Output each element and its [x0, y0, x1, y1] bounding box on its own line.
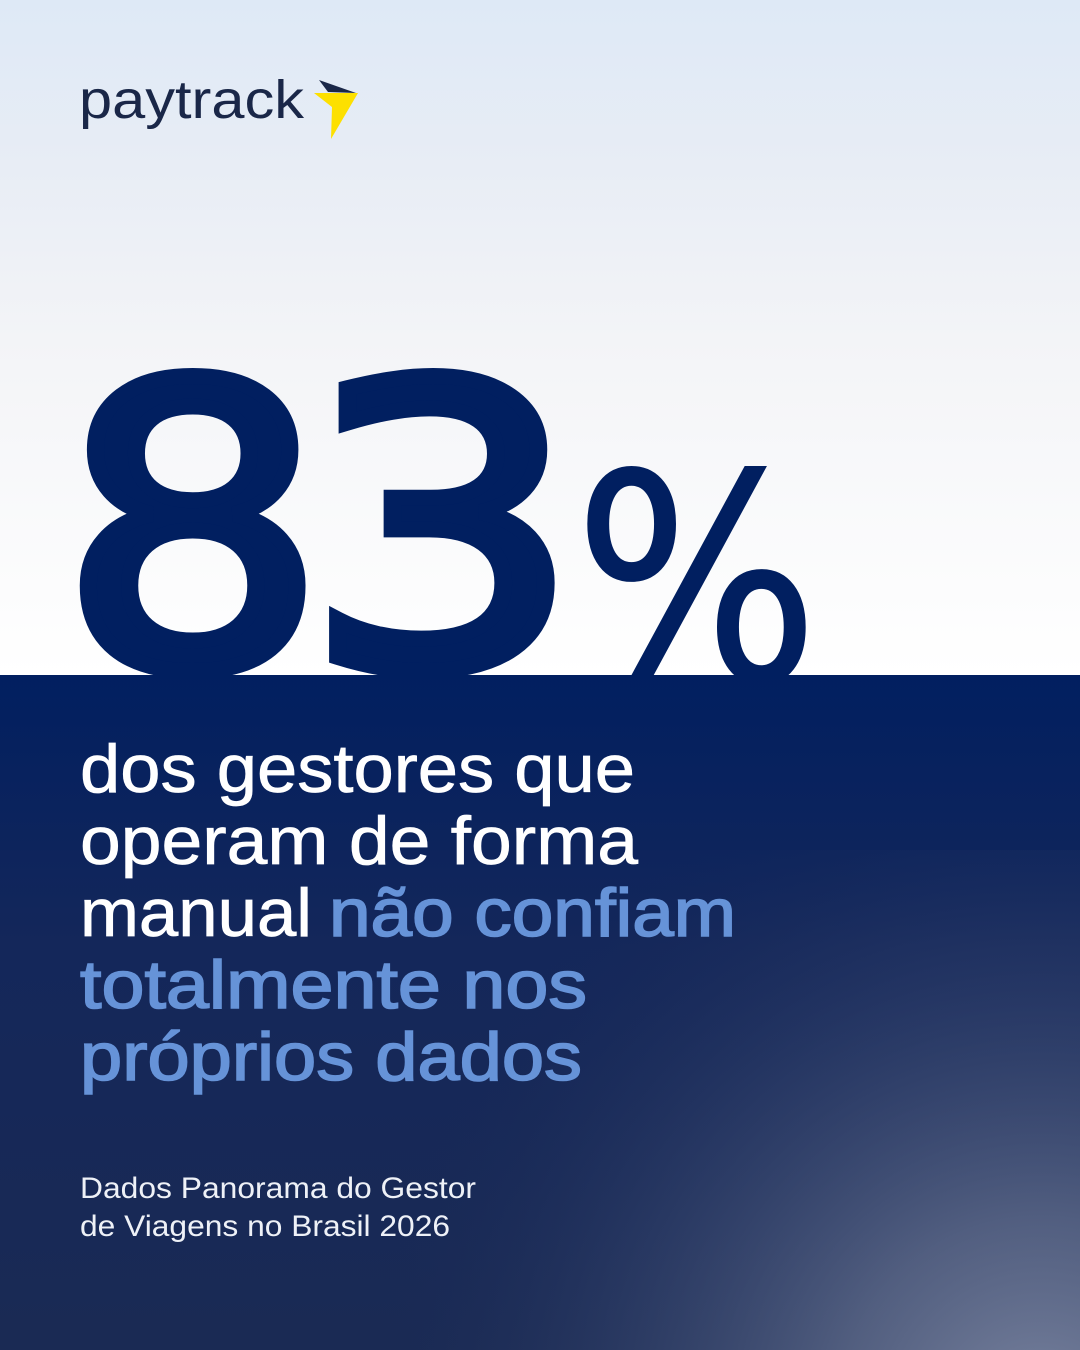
- source note: [80, 1172, 476, 1243]
- source line 1: Dados Panorama do Gestor: [80, 1172, 476, 1205]
- light gradient background: [0, 0, 1080, 676]
- logo: paytrack: [79, 70, 358, 139]
- headline word: manual: manual: [80, 875, 312, 951]
- headline statement: [80, 731, 736, 1095]
- logo wordmark: paytrack: [79, 70, 305, 130]
- headline line 4: totalmente nos: [80, 947, 587, 1023]
- headline line 5: próprios dados: [80, 1019, 582, 1095]
- headline line 1: dos gestores que: [80, 731, 635, 807]
- headline line 3: [80, 875, 736, 951]
- highlighted words: não confiam: não confiam: [329, 875, 736, 951]
- headline line 2: operam de forma: [80, 803, 638, 879]
- big number: 83%: [60, 304, 819, 758]
- digit 8: 8: [60, 304, 326, 758]
- digit 3: 3: [305, 305, 580, 758]
- dark navy panel: [0, 675, 1080, 1350]
- source line 2: de Viagens no Brasil 2026: [80, 1210, 450, 1243]
- logo icon: paper plane arrow: [314, 80, 358, 139]
- percent sign: %: [574, 414, 819, 748]
